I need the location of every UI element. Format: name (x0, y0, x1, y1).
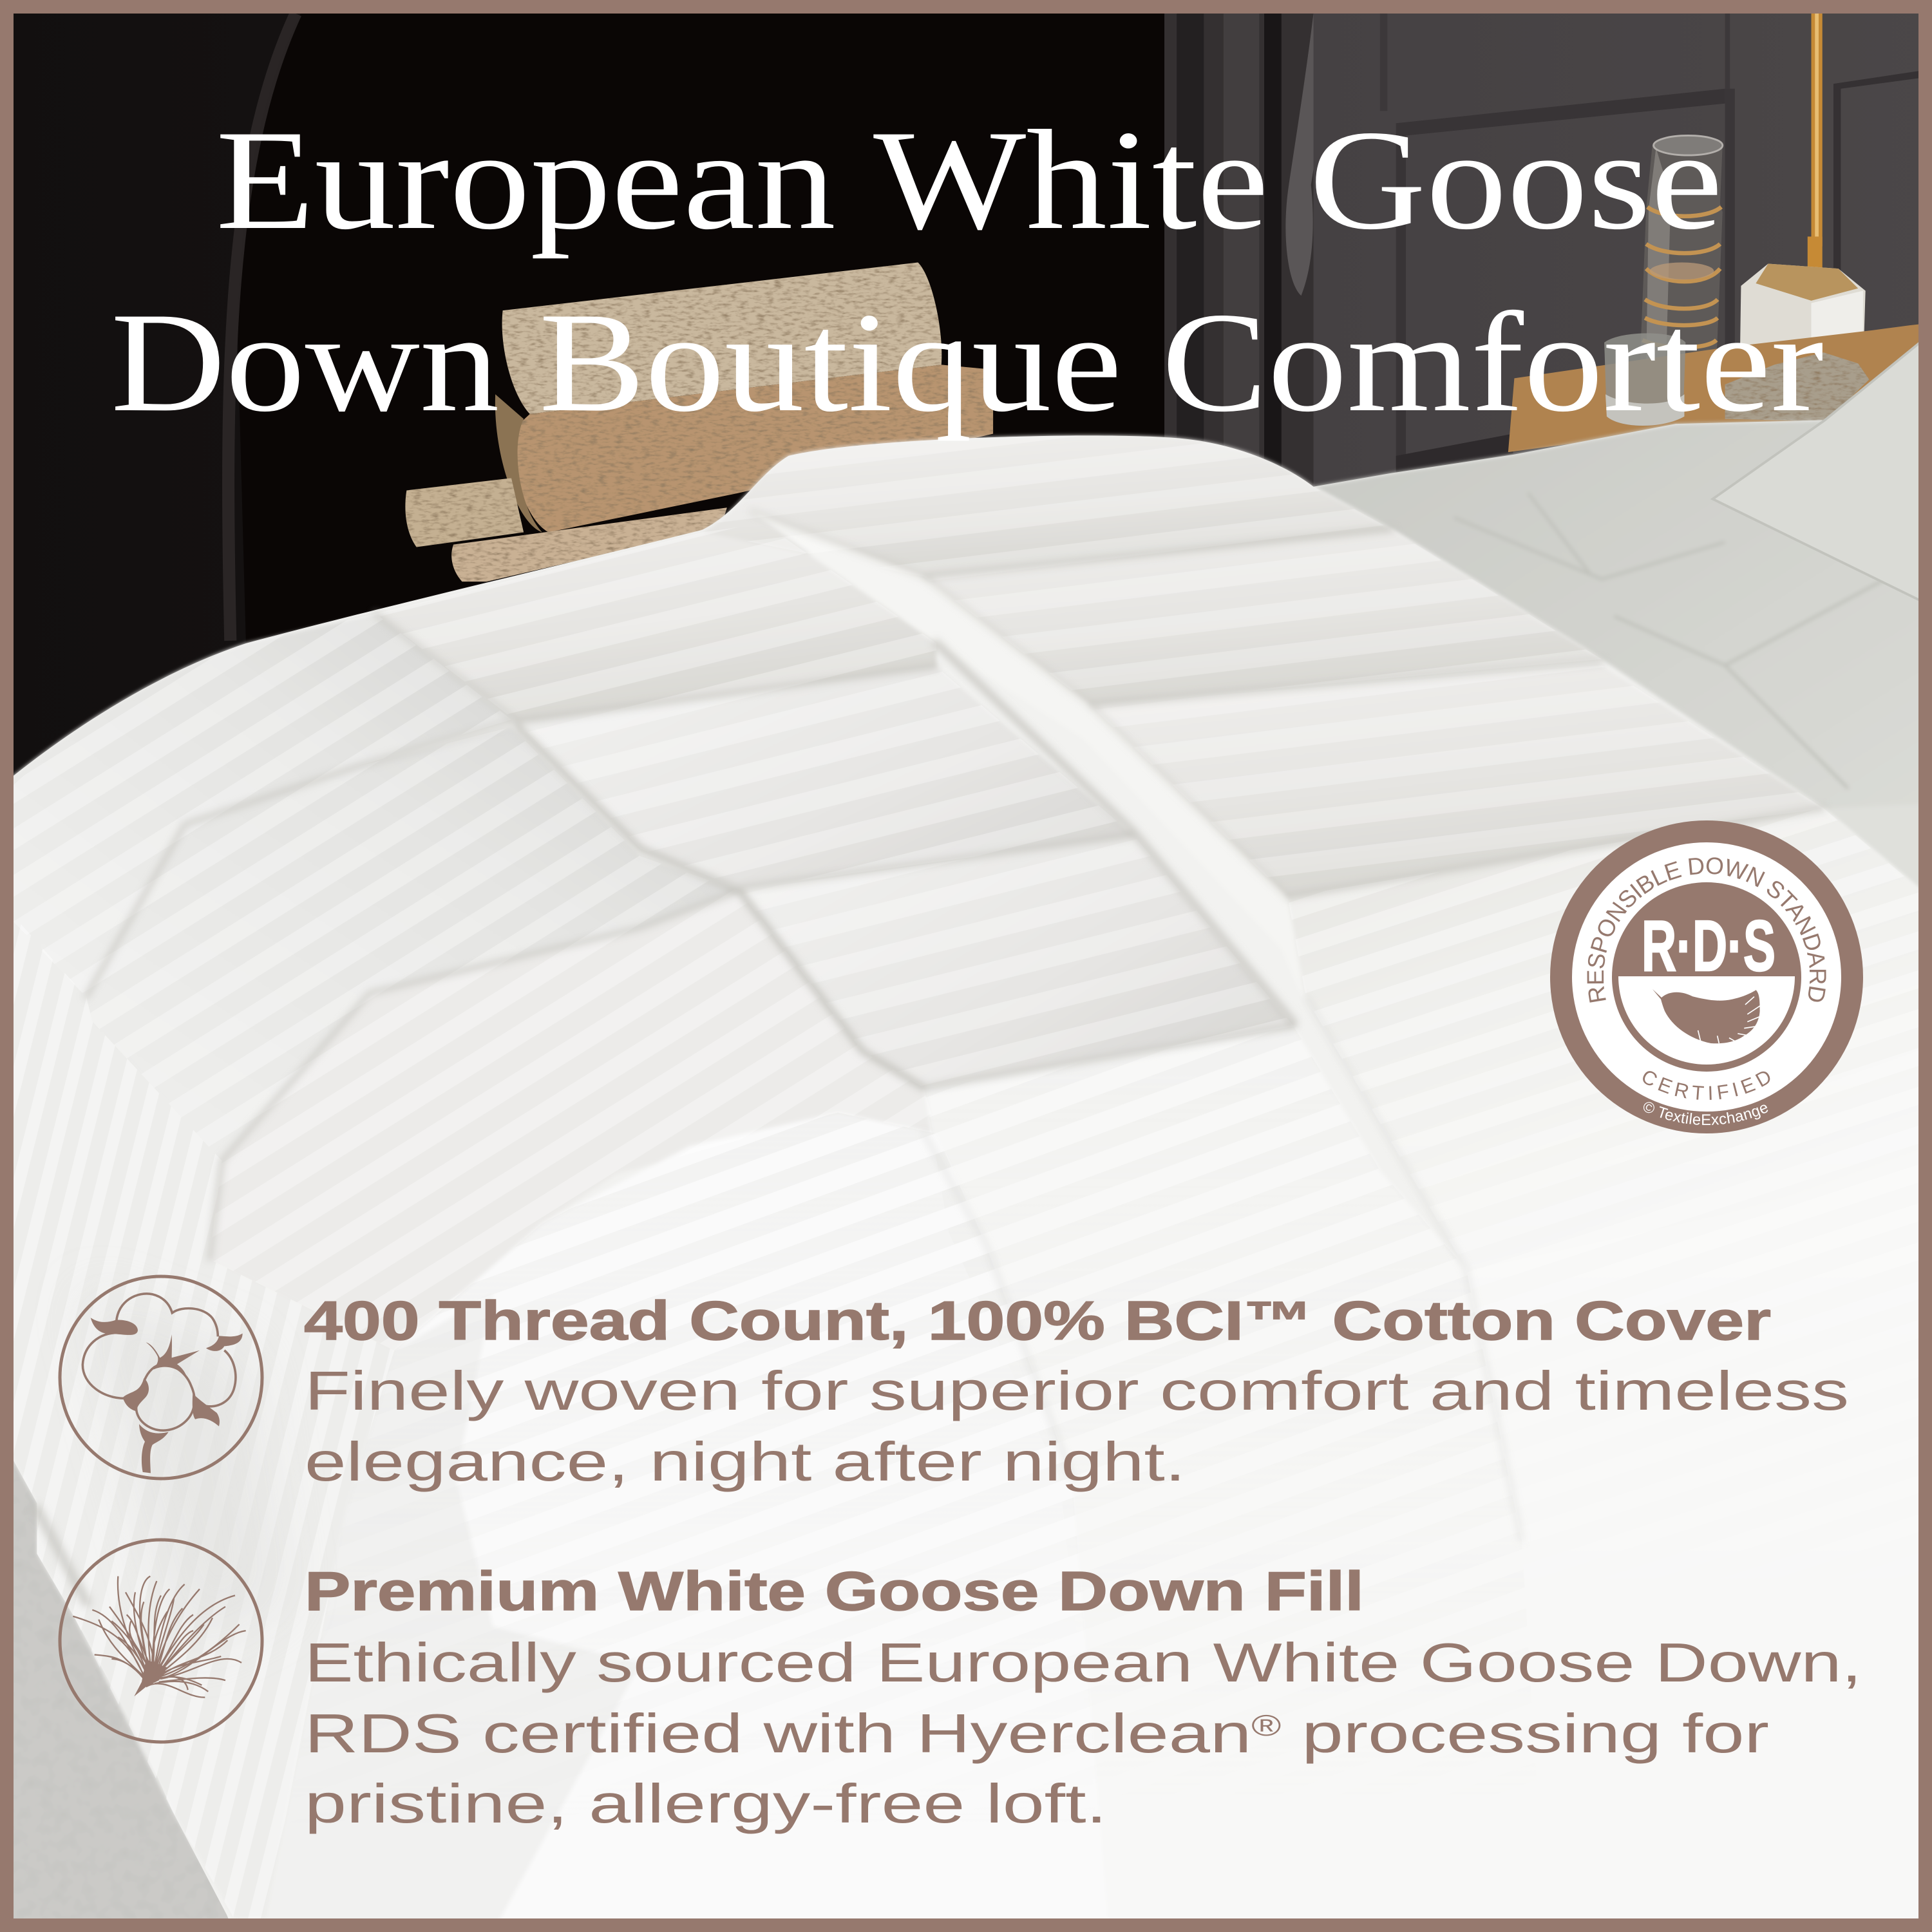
panel: centre lower (924, 1027, 1546, 1932)
flap: third panel (1090, 665, 1824, 897)
panel: back centre (376, 524, 936, 722)
panel: left lower (209, 891, 936, 1350)
badge: RDS certified (1550, 820, 1863, 1133)
glass vase (1639, 135, 1723, 394)
log: upper birch (502, 263, 942, 414)
icon: feather (1653, 989, 1760, 1043)
lamp marble base (1740, 263, 1866, 370)
flap: top (703, 435, 1392, 576)
cotton boll drawing (82, 1294, 243, 1473)
panel: far left drop (10, 912, 394, 1918)
flap: second panel (924, 530, 1602, 705)
badge outer ring (1550, 820, 1863, 1133)
quilted panels (10, 435, 1932, 1932)
soft seams (37, 511, 1824, 1602)
badge ring text top: RESPONSIBLE DOWN STANDARD (1587, 857, 1826, 1003)
badge lower half (1618, 976, 1795, 1065)
icon: cotton boll (60, 1276, 262, 1479)
flap: side fold (752, 511, 1303, 1001)
fireplace mantel (0, 0, 1932, 887)
badge centre disc (1612, 882, 1801, 1072)
feature 1 body line 1: Finely woven for superior comfort and timeless (305, 1361, 1849, 1422)
brass lamp (1740, 0, 1866, 370)
feature 2 heading: Premium White Goose Down Fill (305, 1561, 1364, 1622)
panel: centre upper (518, 667, 1133, 888)
soft shading on lower left (86, 1294, 283, 1651)
rock (1725, 352, 1869, 421)
carpet floor (0, 1442, 345, 1932)
feature 2 body line 1: Ethically sourced European White Goose Down, (305, 1633, 1862, 1694)
icon: goose down plume (60, 1540, 262, 1742)
panel: bottom puff (266, 1113, 1109, 1932)
feature 2 body line 2: ® (1251, 1709, 1281, 1742)
feature text: down fill (305, 1561, 1862, 1835)
title (111, 101, 1824, 442)
feature 2 body line 3: pristine, allergy-free loft. (305, 1774, 1107, 1835)
mantel arch highlight (229, 14, 296, 641)
plume ring (60, 1540, 262, 1742)
pillow (1712, 333, 1932, 606)
badge white ring (1572, 842, 1841, 1112)
badge ring text bottom: CERTIFIED (1643, 1071, 1770, 1100)
cotton ring (60, 1276, 262, 1479)
right lower panel (1466, 1171, 1932, 1932)
plume strands (73, 1577, 246, 1698)
mantel column details (1177, 0, 1338, 518)
log: left small (405, 478, 524, 547)
water glass (1604, 334, 1685, 426)
firewood logs (405, 263, 993, 582)
right mantel column (1164, 0, 1343, 518)
side table (1508, 323, 1932, 452)
badge RDS letters: R·D·S (1642, 906, 1776, 986)
panel: centre middle (739, 835, 1294, 1088)
title line 1: European White Goose (216, 101, 1723, 260)
wall (1314, 0, 1932, 518)
fireplace opening (238, 0, 1164, 887)
badge ring text bottom (1643, 1071, 1770, 1100)
feature text: cotton cover (304, 1291, 1849, 1493)
badge copyright text: © TextileExchange (1643, 1102, 1768, 1125)
flap: lower right (1287, 808, 1932, 1269)
panel: back left (10, 614, 511, 997)
feature 2 body line 2: RDS certified with Hyerclean (305, 1703, 1001, 1765)
title line 2: Down Boutique Comforter (111, 283, 1824, 442)
stripes fading toward the foot of the bed (680, 887, 1392, 1345)
feature 1 body line 2: elegance, night after night. (305, 1432, 1186, 1493)
wall moulding (1380, 14, 1932, 475)
right back quilting (1314, 420, 1932, 900)
feature 1 heading: 400 Thread Count, 100% BCI™ Cotton Cover (304, 1291, 1771, 1352)
log: lower (451, 507, 727, 582)
log: bark (511, 365, 993, 533)
feature 2 body line 2: processing for (1281, 1703, 1769, 1765)
stripes (20, 435, 1815, 1810)
panel: left middle (86, 727, 739, 1160)
